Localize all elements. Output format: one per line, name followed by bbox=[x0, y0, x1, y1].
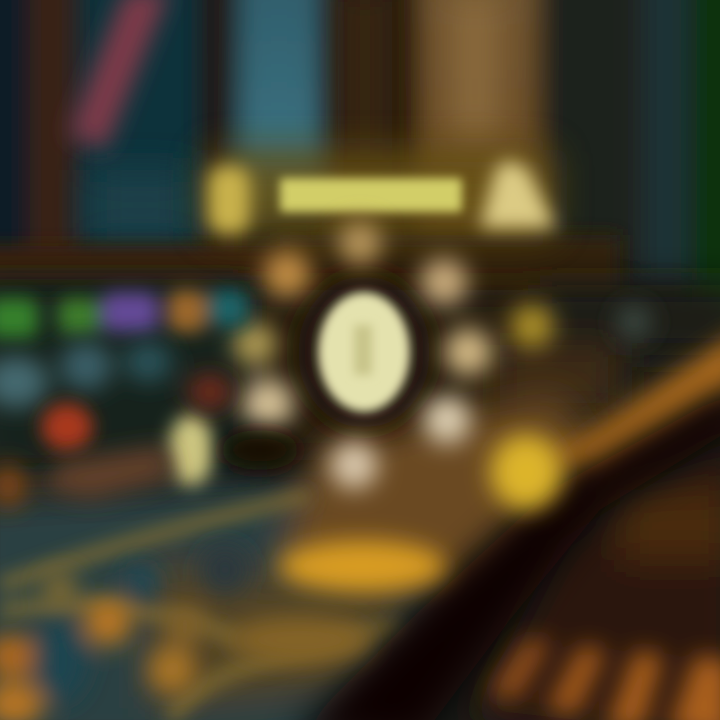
lower right dark panel bbox=[470, 430, 720, 720]
banner: right bell lamp bbox=[480, 160, 556, 228]
muted buttons row bbox=[0, 342, 232, 410]
brown horizontal sill bbox=[0, 235, 620, 295]
tall pale lantern bbox=[168, 414, 214, 486]
background: middle dark area bbox=[0, 285, 720, 475]
bright yellow spot bbox=[490, 434, 562, 510]
background: lower blue and gold floor bbox=[0, 395, 600, 720]
red button bbox=[41, 403, 93, 451]
banner: yellow bar bbox=[280, 178, 462, 212]
column highlights bbox=[90, 0, 500, 240]
brown desk block bbox=[0, 430, 300, 508]
background: upper window columns bbox=[0, 0, 720, 310]
golden floor lines bbox=[0, 495, 400, 720]
colored buttons row bbox=[0, 290, 248, 338]
orange diagonal rail bbox=[540, 330, 720, 470]
orange dots lower left bbox=[0, 546, 372, 720]
pink diagonal ribbon bbox=[68, 0, 170, 150]
orbiting round icons bbox=[233, 221, 652, 489]
banner: glow behind bar and lamps bbox=[205, 150, 555, 235]
golden dish bbox=[278, 540, 446, 592]
black diagonal shadow bbox=[290, 385, 720, 720]
orange stripes lower right bbox=[488, 640, 720, 720]
central coin shape bbox=[298, 276, 430, 428]
banner: left yellow lamp bbox=[208, 166, 250, 234]
